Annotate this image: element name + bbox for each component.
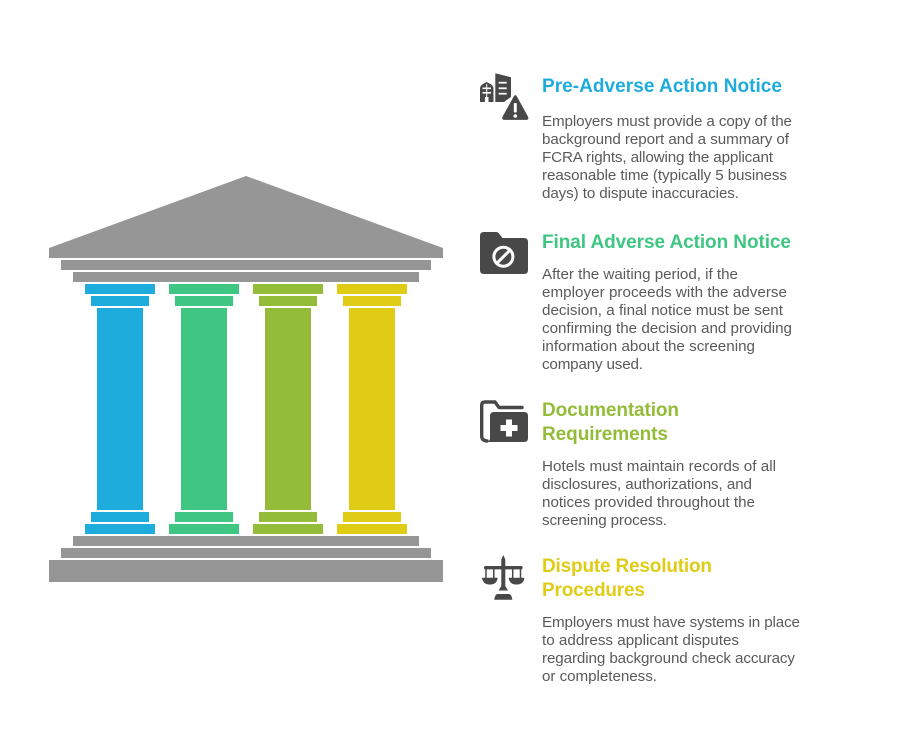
heading: Dispute Resolution Procedures: Dispute Resolution <box>542 556 712 577</box>
temple base <box>49 536 443 582</box>
text: dispute description: regarding background check accuracy <box>542 650 795 667</box>
heading: Documentation Requirements <box>542 400 679 445</box>
text: documentation description <box>542 458 776 529</box>
text: documentation description: screening process. <box>542 512 667 529</box>
temple roof <box>49 176 443 282</box>
heading: Final Adverse Action Notice: Final Adverse Action Notice <box>542 232 791 253</box>
pillar: yellow <box>337 284 407 534</box>
text: final adverse description: decision, a final notice must be sent <box>542 302 784 319</box>
text: pre-adverse description: Employers must provide a copy of the <box>542 113 792 130</box>
heading: Documentation Requirements: Requirements <box>542 424 668 445</box>
text: final adverse description: employer proceeds with the adverse <box>542 284 787 301</box>
heading: Documentation Requirements: Documentation <box>542 400 679 421</box>
text: dispute description: or completeness. <box>542 668 657 685</box>
text: pre-adverse description: reasonable time (typically 5 business <box>542 167 787 184</box>
text: documentation description: Hotels must maintain records of all <box>542 458 776 475</box>
pillar: green <box>169 284 239 534</box>
text: final adverse description: After the waiting period, if the <box>542 266 738 283</box>
text: pre-adverse description: days) to dispute inaccuracies. <box>542 185 739 202</box>
text: documentation description: disclosures, authorizations, and <box>542 476 752 493</box>
text: final adverse description: confirming the decision and providing <box>542 320 792 337</box>
icon: balance scales <box>482 555 524 600</box>
temple diagram <box>49 176 443 582</box>
text: pre-adverse description <box>542 113 792 202</box>
text: final adverse description: information about the screening <box>542 338 755 355</box>
text: final adverse description: company used. <box>542 356 643 373</box>
text: documentation description: notices provided throughout the <box>542 494 755 511</box>
heading: Dispute Resolution Procedures: Procedures <box>542 580 645 601</box>
heading: Dispute Resolution Procedures <box>542 556 712 601</box>
text: pre-adverse description: FCRA rights, allowing the applicant <box>542 149 774 166</box>
text: dispute description <box>542 614 800 685</box>
pillar: olive <box>253 284 323 534</box>
text: dispute description: to address applicant disputes <box>542 632 739 649</box>
text: pre-adverse description: background report and a summary of <box>542 131 790 148</box>
text: dispute description: Employers must have systems in place <box>542 614 800 631</box>
text: final adverse description <box>542 266 792 373</box>
icon: buildings with warning <box>480 73 529 120</box>
icon: folder with plus <box>482 402 528 442</box>
pillar: blue <box>85 284 155 534</box>
heading: Pre-Adverse Action Notice: Pre-Adverse Action Notice <box>542 76 782 97</box>
icon: folder with prohibition sign <box>480 232 528 274</box>
